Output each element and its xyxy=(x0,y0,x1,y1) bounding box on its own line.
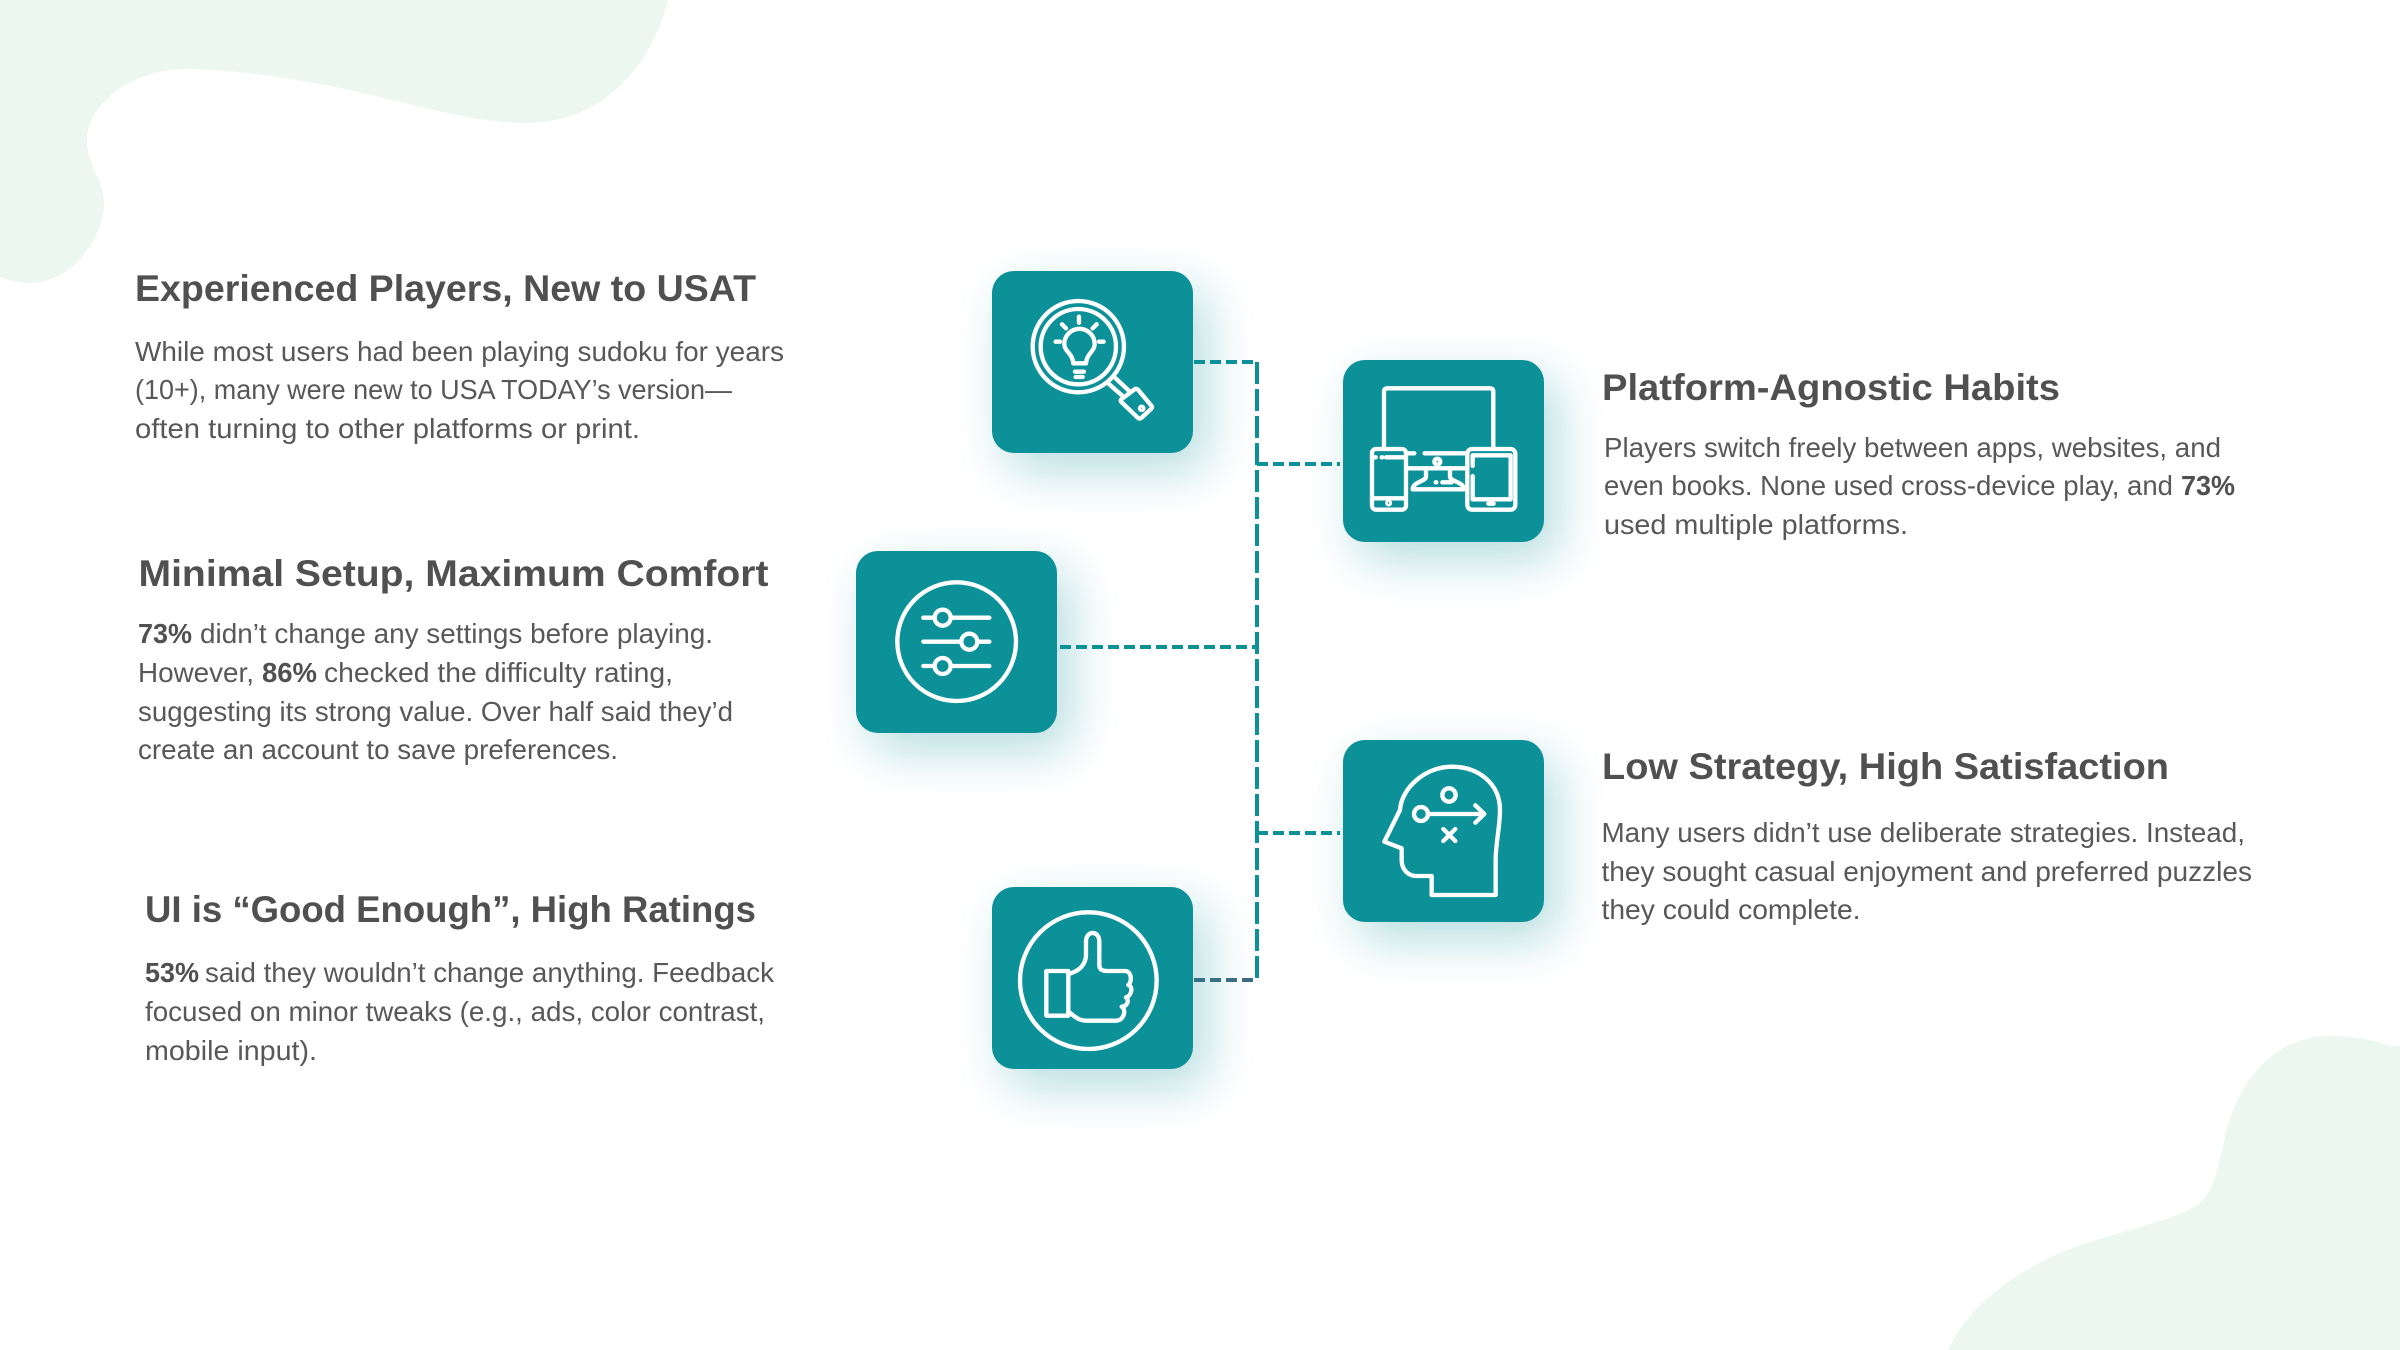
body: 73% xyxy=(2181,470,2235,501)
body xyxy=(145,957,774,1066)
body: mobile input). xyxy=(145,1035,317,1066)
text block: Low Strategy xyxy=(1602,746,2252,925)
card: sliders icon xyxy=(856,551,1071,751)
body: they could complete. xyxy=(1602,894,1860,925)
body: Many users didn’t use deliberate strategies. Instead, xyxy=(1602,817,2245,848)
text block: Minimal Setup xyxy=(138,553,768,765)
card: devices icon xyxy=(1343,360,1558,560)
icon: head with play diagram xyxy=(1384,767,1500,895)
heading: Experienced Players, New to USAT xyxy=(135,268,756,309)
body: often turning to other platforms or print. xyxy=(135,413,640,444)
heading: Platform-Agnostic Habits xyxy=(1602,367,2060,408)
icon: settings sliders in circle xyxy=(897,582,1016,701)
background blob: bottom right xyxy=(1948,1036,2400,1350)
card: strategy head icon xyxy=(1343,740,1558,940)
body: even books. None used cross-device play, and xyxy=(1604,470,2173,501)
body: focused on minor tweaks (e.g., ads, color contrast, xyxy=(145,996,765,1027)
body xyxy=(1604,432,2235,540)
body: 73% xyxy=(138,618,192,649)
body: they sought casual enjoyment and preferred puzzles xyxy=(1602,856,2252,887)
body xyxy=(135,336,784,444)
body: didn’t change any settings before playing. xyxy=(200,618,713,649)
text block: UI is Good Enough xyxy=(145,889,774,1066)
heading: Low Strategy, High Satisfaction xyxy=(1602,746,2169,787)
body: suggesting its strong value. Over half said they’d xyxy=(138,696,733,727)
body: (10+), many were new to USA TODAY’s version— xyxy=(135,374,732,405)
text block: Experienced Players xyxy=(135,268,784,444)
body: Players switch freely between apps, websites, and xyxy=(1604,432,2221,463)
body: said they wouldn’t change anything. Feedback xyxy=(205,957,774,988)
body xyxy=(1602,817,2252,925)
body: 86% xyxy=(262,657,317,688)
card: lightbulb magnifier icon xyxy=(992,271,1207,471)
body: checked the difficulty rating, xyxy=(324,657,673,688)
heading: UI is “Good Enough”, High Ratings xyxy=(145,889,756,930)
icon: monitor, phone and tablet xyxy=(1372,388,1515,510)
card: thumbs up icon xyxy=(992,887,1207,1087)
heading: Minimal Setup, Maximum Comfort xyxy=(138,553,768,594)
body: create an account to save preferences. xyxy=(138,734,618,765)
body xyxy=(138,618,733,765)
icon: thumbs up in circle xyxy=(1020,912,1157,1049)
body: used multiple platforms. xyxy=(1604,509,1908,540)
body: However, xyxy=(138,657,254,688)
connector: dashed lines xyxy=(1060,362,1340,982)
text block: Platform-Agnostic Habits xyxy=(1602,367,2235,540)
icon: magnifying glass with lightbulb xyxy=(1033,301,1152,419)
body: 53% xyxy=(145,957,199,988)
background blob: top left xyxy=(0,0,668,283)
body: While most users had been playing sudoku for years xyxy=(135,336,784,367)
